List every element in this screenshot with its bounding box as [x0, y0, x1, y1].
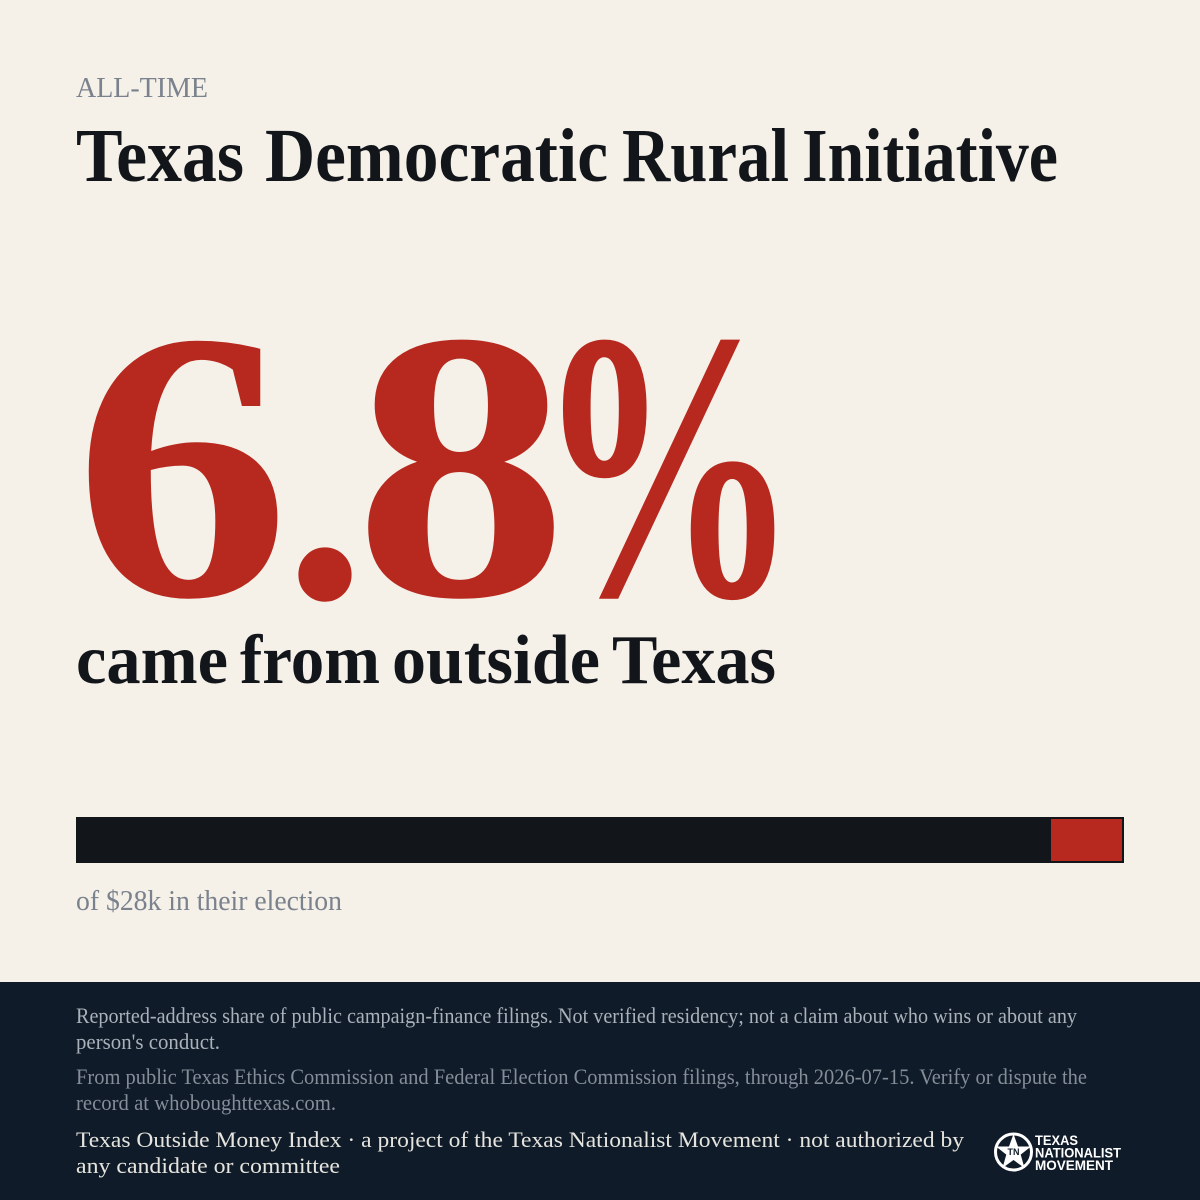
title: Texas	[76, 114, 244, 198]
progress bar	[76, 817, 1124, 863]
subheading: from	[240, 622, 380, 699]
disclaimer text: person's conduct.	[76, 1029, 220, 1054]
footer panel	[0, 982, 1200, 1200]
logo: Texas Nationalist Movement: TN	[1008, 1147, 1020, 1157]
disclaimer text: Reported-address share of public campaign-finance filings. Not verified residency; not a claim about who wins or about any	[76, 1003, 1077, 1028]
logo: Texas Nationalist Movement: TEXAS	[1035, 1132, 1078, 1148]
subheading	[76, 622, 776, 699]
big percentage	[74, 254, 799, 679]
title: Democratic	[265, 114, 608, 198]
title: Rural	[622, 114, 789, 198]
logo: Texas Nationalist Movement: NATIONALIST	[1035, 1144, 1121, 1160]
subheading: outside	[392, 622, 600, 699]
logo: Texas Nationalist Movement	[996, 1132, 1121, 1173]
subheading: came	[76, 622, 228, 699]
source text: record at whoboughttexas.com.	[76, 1090, 336, 1115]
project credit: any candidate or committee	[76, 1153, 340, 1178]
eyebrow label: ALL-TIME	[76, 73, 208, 104]
title	[76, 114, 1058, 198]
logo: Texas Nationalist Movement: MOVEMENT	[1035, 1157, 1113, 1173]
big percentage: .	[284, 299, 366, 670]
bar caption: of $28k in their election	[76, 886, 342, 917]
big percentage: %	[536, 254, 799, 679]
big percentage: 8	[354, 254, 568, 679]
big percentage: 6	[74, 254, 290, 679]
title: Initiative	[802, 114, 1058, 198]
project credit: Texas Outside Money Index · a project of the Texas Nationalist Movement · not authorized by	[76, 1127, 964, 1152]
subheading: Texas	[612, 622, 776, 699]
source text: From public Texas Ethics Commission and Federal Election Commission filings, through 2026-07-15. Verify or dispute the	[76, 1064, 1087, 1089]
